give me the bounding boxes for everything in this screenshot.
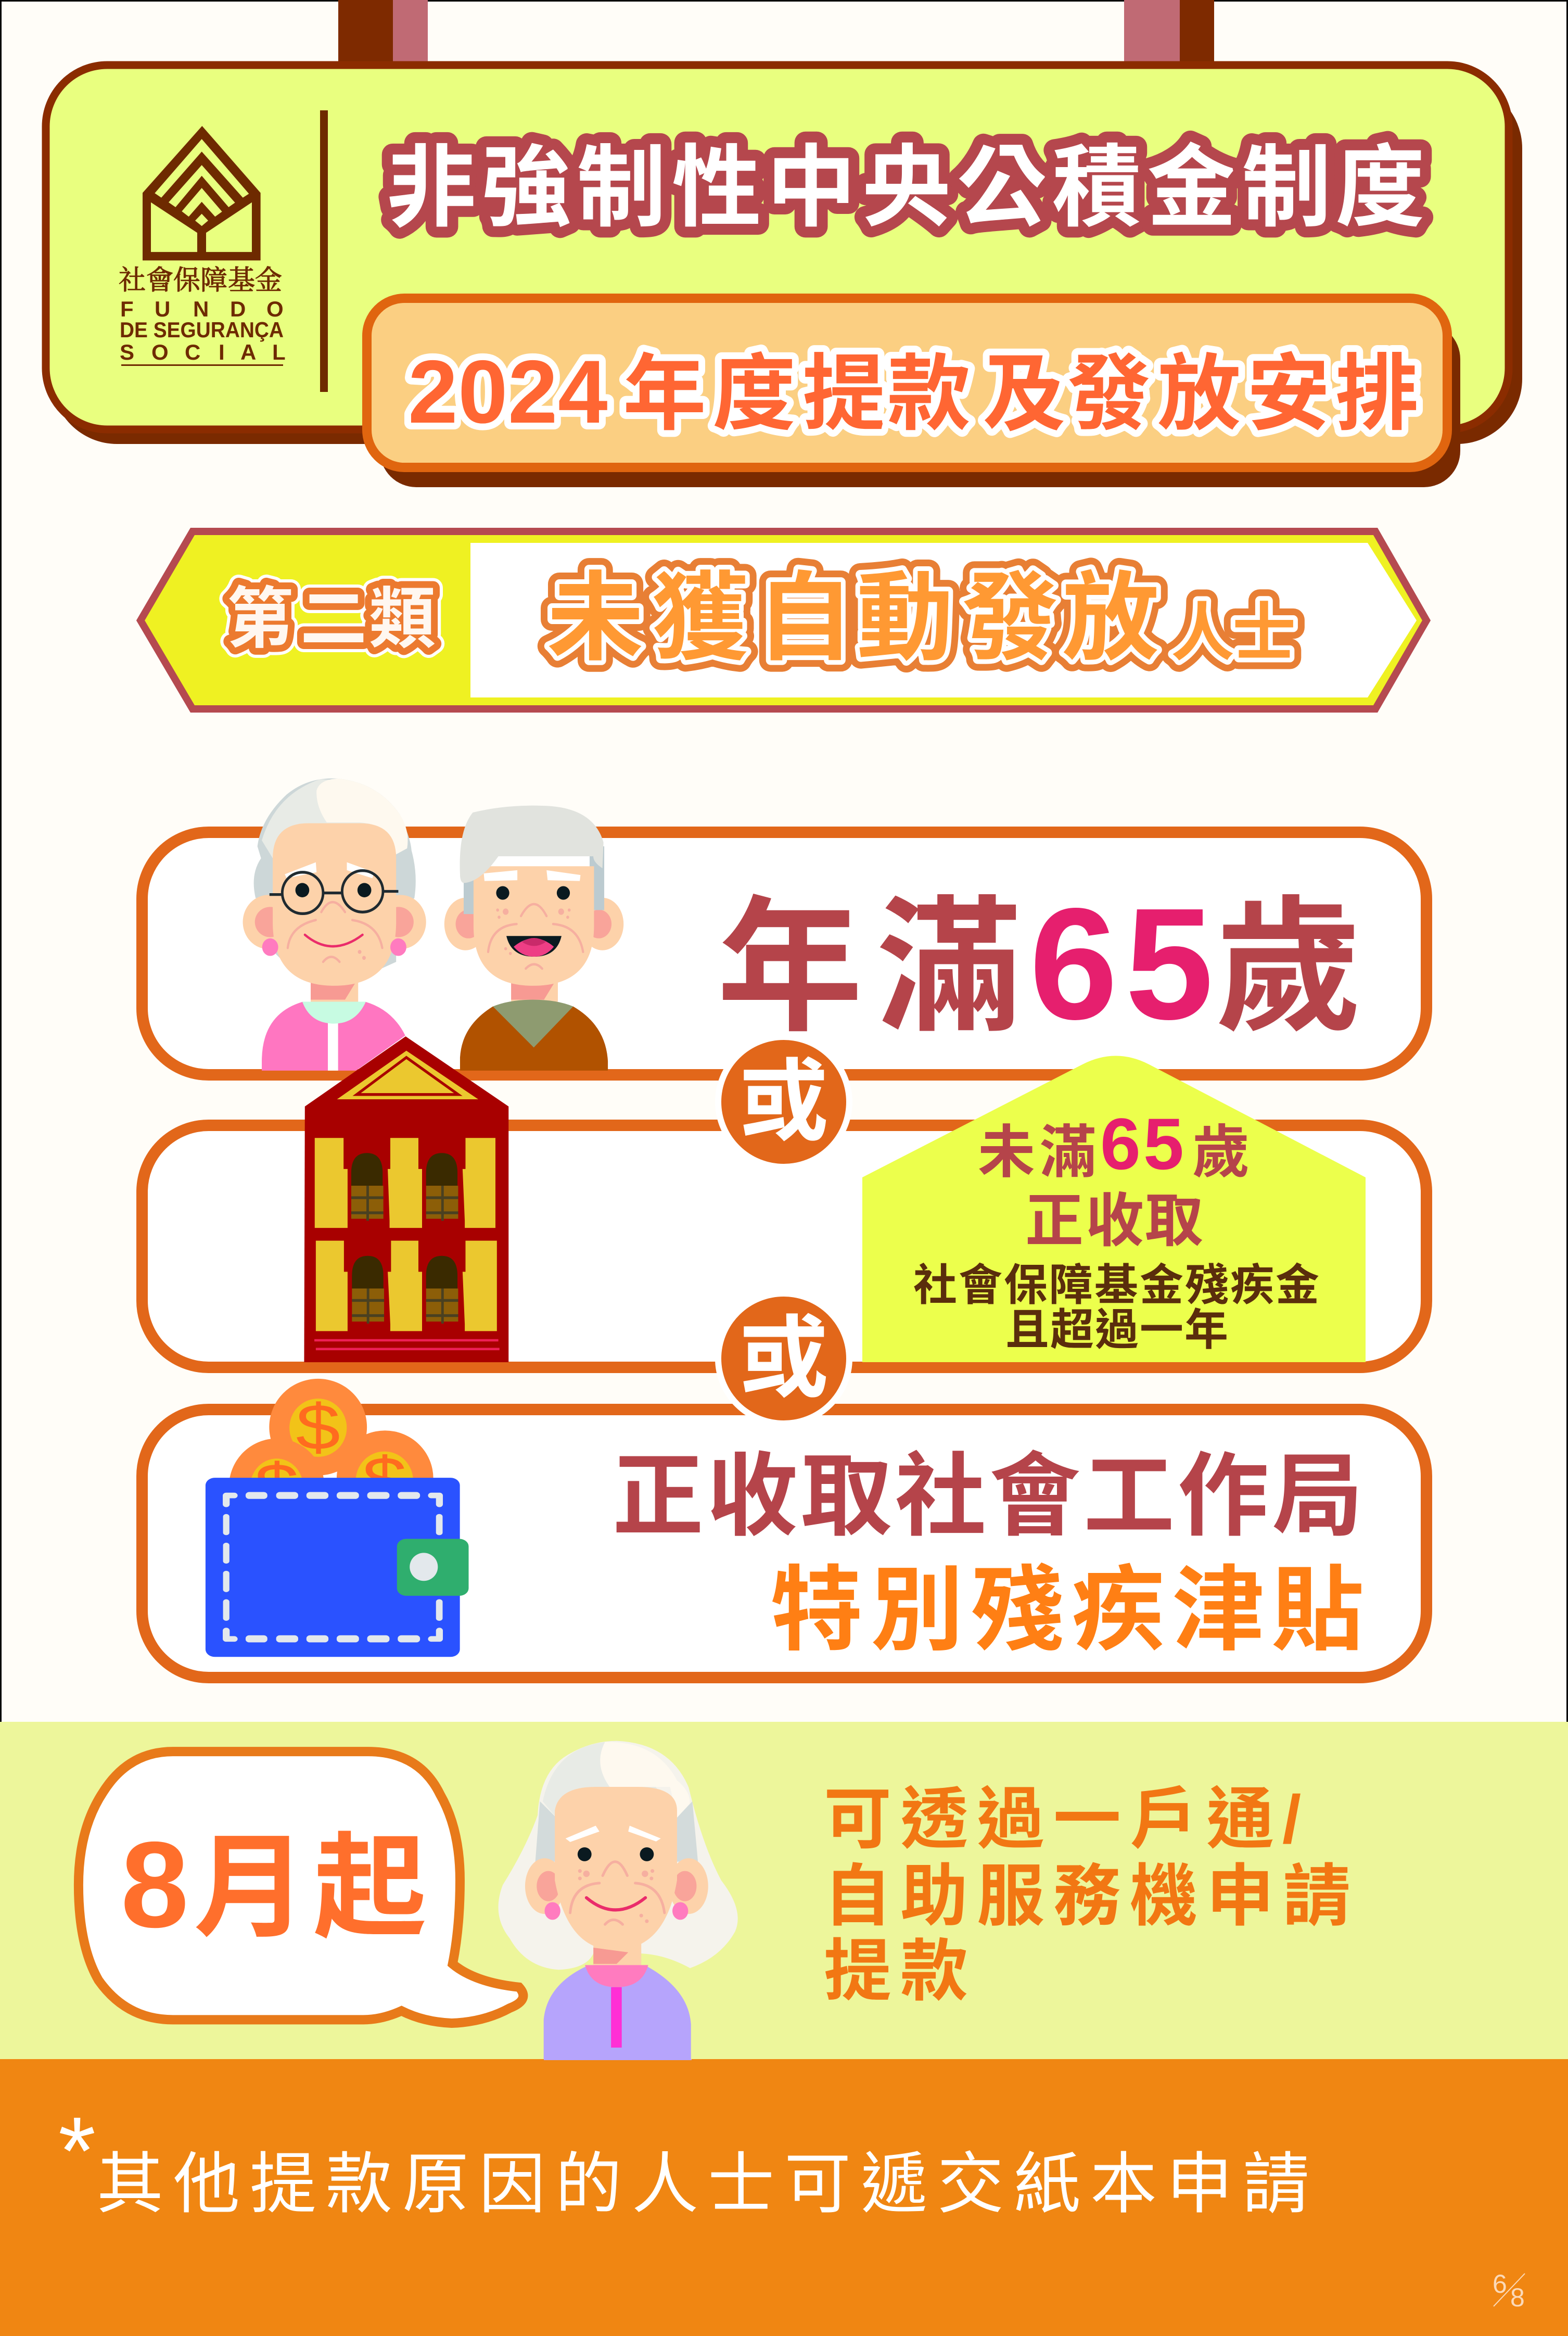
panel: condition one frame — [142, 832, 1426, 1075]
text: apply via one-account or self-service kiosk — [824, 1781, 1350, 2009]
text: aged 65 or above: 年滿 — [717, 887, 1022, 1049]
footnote: others may submit paper application: * — [58, 2098, 96, 2205]
heading: category name: 人士 — [1171, 598, 1296, 668]
text: fund disability pension over one year: 社會保障基金殘疾金 — [913, 1261, 1319, 1310]
label: category two: 第二類 — [227, 582, 436, 656]
footnote: others may submit paper application — [58, 2098, 1309, 2221]
logo: social security fund — [119, 126, 286, 366]
icon: right coin — [337, 1430, 434, 1526]
text: apply via one-account or self-service kiosk: 可透過一戶通 — [824, 1781, 1274, 1857]
text: aged 65 or above: 歲 — [1216, 887, 1361, 1049]
logo text: SOCIAL — [120, 340, 286, 364]
text: under 65: 未滿 — [978, 1121, 1097, 1185]
panel: condition two frame — [142, 1125, 1426, 1367]
callout: speech bubble from August: 月起 — [194, 1825, 427, 1951]
panel: category banner — [141, 531, 1426, 709]
heading: category name: 未獲自動發放 — [547, 565, 1159, 672]
icon: house emblem — [143, 126, 261, 260]
icon: right coin: $ — [362, 1444, 406, 1516]
text: receiving social welfare bureau special disability allowance: 正收取社會工作局 — [613, 1446, 1363, 1547]
panel: subtitle plate — [367, 298, 1460, 487]
text: aged 65 or above: 65 — [1029, 875, 1214, 1052]
icon: grandmother with glasses — [243, 779, 426, 1071]
icon: wallet with coins — [206, 1379, 469, 1657]
heading: subtitle: 2024 — [408, 342, 608, 442]
heading: subtitle: 年度提款及發放安排 — [623, 347, 1419, 440]
icon: grandmother with long hair — [499, 1741, 738, 2060]
text: fund disability pension over one year — [913, 1261, 1319, 1354]
page number: 6 — [1493, 2269, 1507, 2299]
heading: category name: 人士 — [1171, 598, 1296, 668]
logo text: 社會保障基金 — [119, 266, 282, 296]
text: receiving social welfare bureau special disability allowance — [613, 1446, 1364, 1662]
icon: top coin: $ — [296, 1391, 340, 1463]
panel: condition three frame — [142, 1410, 1426, 1678]
badge: or, first: 或 — [739, 1052, 828, 1152]
panel: header sign — [46, 65, 1522, 444]
hanging straps — [338, 0, 1214, 65]
badge: or, first — [718, 1037, 849, 1167]
logo text: DE SEGURANÇA — [120, 318, 284, 342]
badge: or, second — [718, 1293, 849, 1424]
page number: 8 — [1510, 2283, 1525, 2312]
badge: or, second: 或 — [739, 1309, 828, 1408]
text: currently receiving: 正收取 — [1025, 1188, 1203, 1253]
logo text: FUNDO — [120, 297, 284, 321]
text: apply via one-account or self-service kiosk: 提款 — [824, 1933, 968, 2009]
panel: footer band — [0, 2059, 1568, 2336]
icon: left coin — [229, 1439, 324, 1535]
page number — [1493, 2269, 1525, 2312]
heading: main title: 非強制性中央公積金制度 — [387, 138, 1425, 238]
text: receiving social welfare bureau special disability allowance: 特別殘疾津貼 — [770, 1558, 1364, 1662]
text: under 65: 歲 — [1192, 1121, 1250, 1185]
icon: red and yellow building — [304, 1036, 508, 1362]
callout: speech bubble from August: 8 — [121, 1816, 189, 1953]
panel: application band — [0, 1722, 1568, 2059]
icon: purple jacket overlap — [544, 2059, 692, 2060]
text: apply via one-account or self-service kiosk: 自助服務機申請 — [824, 1858, 1350, 1934]
callout: under 65 disability pension — [862, 1056, 1366, 1362]
logo text — [119, 266, 286, 366]
icon: top coin — [269, 1379, 367, 1476]
callout: speech bubble from August — [79, 1751, 523, 2023]
footnote: others may submit paper application: 其他提款原因的人士可遞交紙本申請 — [97, 2147, 1309, 2221]
icon: grandfather smiling — [444, 806, 623, 1071]
text: under 65: 65 — [1100, 1103, 1184, 1185]
label: category two: 第二類 — [227, 582, 436, 656]
heading: category name: 未獲自動發放 — [547, 565, 1159, 672]
icon: left coin: $ — [254, 1450, 299, 1522]
text: fund disability pension over one year: 且超過一年 — [1005, 1305, 1228, 1354]
text: apply via one-account or self-service kiosk: / — [1282, 1781, 1301, 1857]
